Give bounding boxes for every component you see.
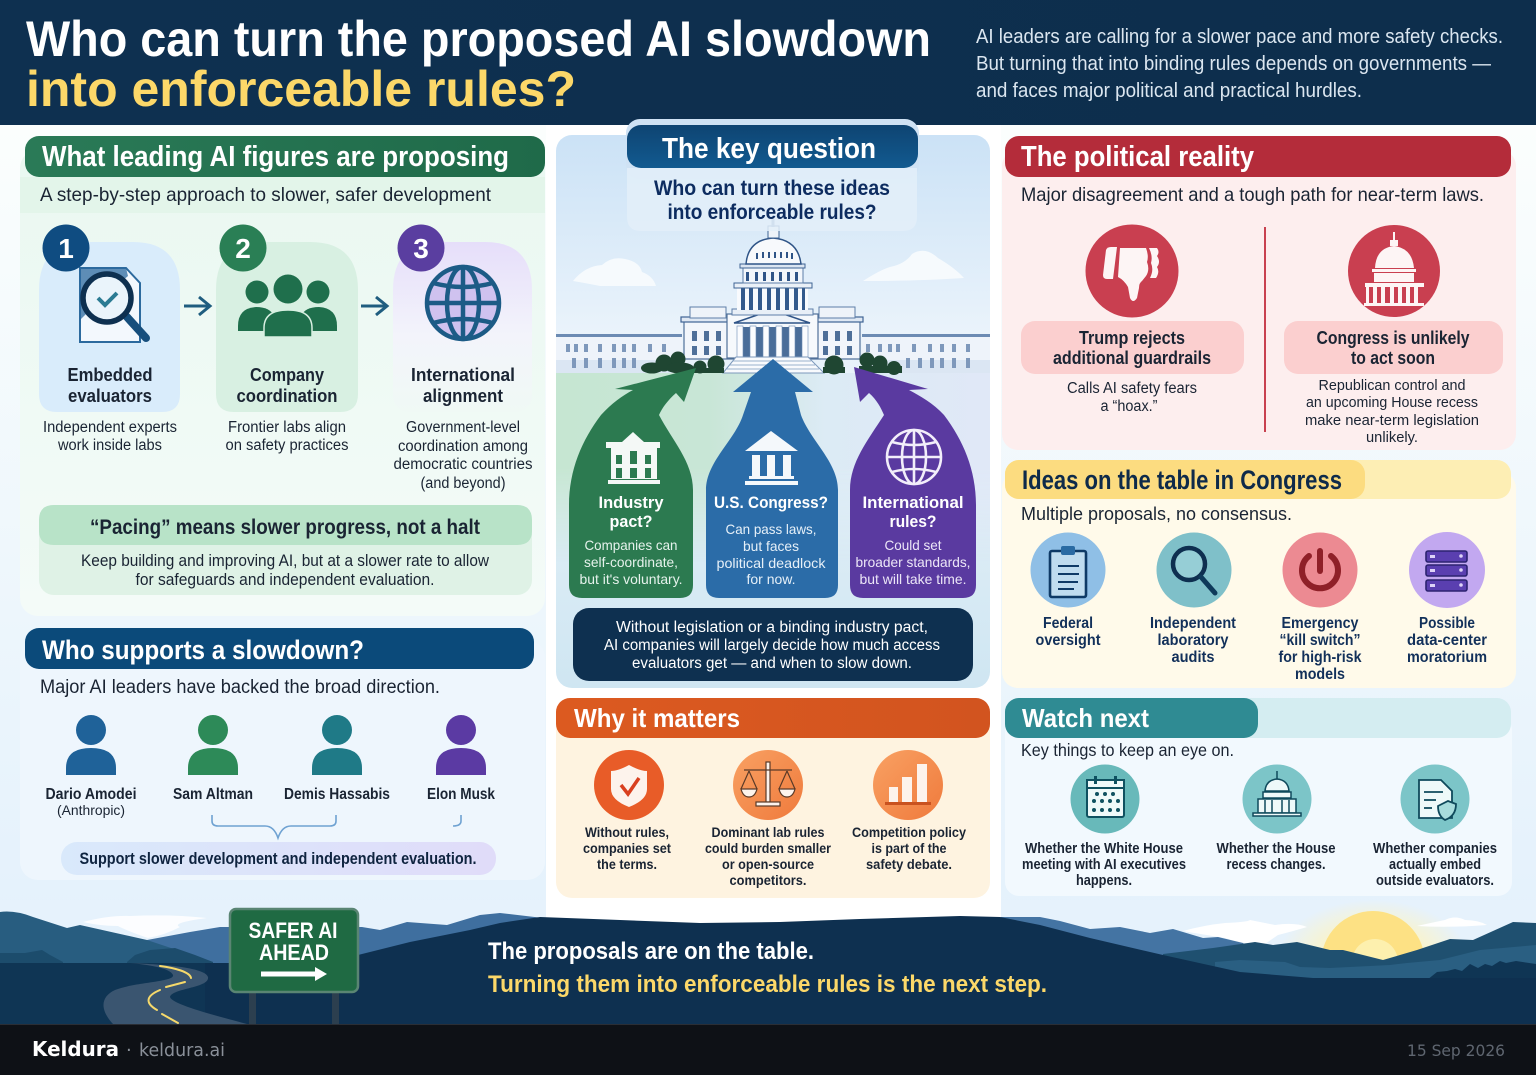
step badge 2: 2	[235, 233, 251, 264]
item: emergency kill switch: models	[1295, 666, 1345, 683]
arrow: U.S. Congress: for now.	[746, 571, 796, 587]
subheading: Multiple proposals, no consensus.	[1021, 503, 1292, 524]
key question text: into enforceable rules?	[668, 201, 876, 224]
item: without rules	[583, 750, 671, 872]
arrow: step 1 to 2	[184, 297, 210, 315]
panel: why it matters	[556, 698, 990, 898]
panel: who supports a slowdown	[20, 628, 545, 880]
step 2 company coordination: on safety practices	[226, 437, 349, 454]
icon: globe	[887, 430, 941, 484]
item: congress unlikely: unlikely.	[1366, 429, 1418, 446]
item: competition policy: safety debate.	[866, 856, 952, 872]
intro text	[976, 26, 1503, 102]
support pill: Support slower development and independent evaluation.	[80, 850, 476, 868]
road sign	[230, 909, 358, 1024]
item: congress unlikely: Congress is unlikely	[1316, 328, 1470, 348]
item: house recess: recess changes.	[1226, 857, 1326, 873]
item: trump rejects: Calls AI safety fears	[1067, 380, 1197, 397]
item: emergency kill switch	[1278, 532, 1362, 683]
item: federal oversight	[1030, 532, 1106, 649]
item: embed outside evaluators: Whether companies	[1373, 841, 1497, 857]
arrow: industry pact: Companies can	[584, 537, 678, 553]
road	[103, 963, 247, 1024]
item: congress unlikely: make near-term legislation	[1305, 412, 1479, 429]
bracket	[212, 815, 461, 838]
heading	[1005, 136, 1511, 177]
item: dominant lab rules: or open-source	[722, 856, 814, 872]
item: white house meeting: happens.	[1076, 873, 1132, 889]
person: Elon Musk	[427, 715, 495, 803]
panel: what leading AI figures are proposing	[20, 136, 545, 616]
person: Sam Altman	[173, 715, 253, 803]
step 3 international alignment: democratic countries	[394, 456, 533, 473]
item: independent laboratory audits	[1150, 532, 1236, 666]
step badge 2	[220, 224, 266, 272]
step 1 embedded evaluators: Independent experts	[43, 419, 177, 436]
arrow: international rules: International	[862, 493, 964, 512]
subheading: Key things to keep an eye on.	[1021, 740, 1234, 760]
step 2 company coordination: coordination	[236, 386, 338, 406]
item: congress unlikely: to act soon	[1351, 348, 1435, 368]
icon: institution	[606, 432, 660, 484]
item: trump rejects: additional guardrails	[1053, 348, 1211, 368]
arrow: international rules: broader standards,	[856, 554, 970, 570]
closing message: The proposals are on the table.	[488, 938, 814, 965]
panel: the key question	[556, 119, 990, 688]
heading: The political reality	[1021, 141, 1254, 173]
callout: without legislation	[573, 608, 973, 681]
footer: ·	[126, 1040, 132, 1061]
step 1 embedded evaluators: work inside labs	[57, 437, 162, 454]
item: data-center moratorium: data-center	[1407, 632, 1487, 649]
subheading: Major AI leaders have backed the broad direction.	[40, 677, 440, 698]
center block	[727, 314, 818, 358]
item: data-center moratorium: Possible	[1419, 615, 1475, 632]
item: white house meeting: Whether the White House	[1025, 841, 1183, 857]
callout: without legislation: evaluators get — and when to slow down.	[632, 655, 912, 672]
icon: capitol	[1364, 232, 1424, 306]
item: independent laboratory audits: audits	[1172, 649, 1214, 666]
item: federal oversight: Federal	[1043, 615, 1093, 632]
heading	[1005, 460, 1511, 499]
divider	[1264, 227, 1266, 432]
callout: pacing: Keep building and improving AI, but at a slower rate to allow	[81, 552, 489, 570]
footer: keldura.ai	[139, 1041, 225, 1061]
step 2 company coordination	[216, 224, 358, 454]
illustration: capitol building	[556, 218, 990, 375]
heading tab: The key question	[662, 133, 876, 165]
arrow: industry pact: self-coordinate,	[584, 554, 678, 570]
step badge 1	[42, 224, 90, 272]
arrow: international rules: rules?	[890, 512, 936, 531]
icon: columned building	[745, 431, 798, 485]
item: competition policy	[852, 750, 966, 872]
header band	[0, 0, 1536, 125]
footer: 15 Sep 2026	[1407, 1041, 1505, 1060]
heading tab	[626, 119, 919, 179]
clouds	[83, 915, 1487, 944]
callout: without legislation: AI companies will largely decide how much access	[604, 637, 940, 654]
callout: pacing: for safeguards and independent evaluation.	[136, 571, 434, 589]
landscape banner	[0, 900, 1536, 1024]
heading: Watch next	[1022, 703, 1149, 733]
item: white house meeting	[1022, 764, 1186, 889]
panel: watch next	[1005, 698, 1512, 896]
item: white house meeting: meeting with AI executives	[1022, 857, 1186, 873]
item: congress unlikely	[1284, 225, 1503, 446]
person: Dario Amodei	[46, 715, 136, 818]
callout: pacing: “Pacing” means slower progress, not a halt	[90, 515, 480, 539]
icon: globe	[427, 267, 499, 339]
item: embed outside evaluators: outside evaluators.	[1376, 873, 1494, 889]
item: dominant lab rules	[705, 750, 831, 888]
step 1 embedded evaluators: Embedded	[68, 365, 152, 385]
step 3 international alignment: Government-level	[406, 419, 520, 436]
wings	[684, 321, 860, 359]
heading: Why it matters	[574, 703, 740, 733]
item: without rules: the terms.	[597, 856, 657, 872]
item: trump rejects: Trump rejects	[1079, 328, 1185, 348]
item: independent laboratory audits: laboratory	[1158, 632, 1229, 649]
arrow: step 2 to 3	[361, 297, 387, 315]
step 3 international alignment	[393, 224, 533, 492]
subheading: Major disagreement and a tough path for near-term laws.	[1021, 184, 1484, 206]
panel: the political reality	[1002, 136, 1516, 450]
person: Demis Hassabis	[284, 715, 390, 803]
road sign: AHEAD	[259, 940, 329, 965]
arrow: U.S. Congress: but faces	[743, 538, 799, 554]
footer	[0, 1024, 1536, 1075]
lawn	[556, 373, 990, 541]
item: without rules: companies set	[583, 840, 671, 856]
heading	[556, 698, 990, 738]
clouds	[573, 251, 964, 286]
dark hill	[205, 916, 1536, 1024]
arrow: industry pact: Industry	[598, 493, 664, 512]
mountains	[0, 912, 1536, 1024]
item: competition policy: Competition policy	[852, 824, 966, 840]
item: dominant lab rules: could burden smaller	[705, 840, 831, 856]
arrow: industry pact: but it's voluntary.	[580, 571, 682, 587]
step 3 international alignment: (and beyond)	[420, 475, 506, 492]
icon: thumbs down	[1103, 247, 1159, 301]
panel: ideas on the table in congress	[1002, 460, 1516, 688]
sun	[1278, 900, 1468, 1016]
item: embed outside evaluators: actually embed	[1389, 857, 1481, 873]
person: Dario Amodei: (Anthropic)	[57, 802, 125, 818]
icon: three people	[238, 274, 337, 337]
item: embed outside evaluators	[1373, 764, 1497, 889]
step 2 company coordination: Company	[250, 365, 324, 385]
person: Sam Altman: Sam Altman	[173, 786, 253, 803]
closing message: Turning them into enforceable rules is the next step.	[488, 971, 1047, 998]
key question text	[627, 168, 917, 231]
support pill	[61, 842, 496, 875]
steps	[723, 357, 824, 373]
item: competition policy: is part of the	[872, 840, 947, 856]
arrow: international rules	[850, 367, 976, 598]
key question text: Who can turn these ideas	[654, 177, 890, 200]
intro text: and faces major political and practical hurdles.	[976, 80, 1362, 102]
item: dominant lab rules: competitors.	[730, 872, 806, 888]
step badge 1: 1	[58, 233, 74, 264]
item: house recess: Whether the House	[1216, 841, 1336, 857]
title: into enforceable rules?	[26, 61, 576, 117]
arrow: U.S. Congress: Can pass laws,	[726, 521, 816, 537]
callout: pacing	[39, 505, 532, 595]
item: data-center moratorium	[1407, 532, 1487, 666]
bushes	[641, 352, 902, 375]
item: federal oversight: oversight	[1036, 632, 1100, 649]
intro text: AI leaders are calling for a slower pace and more safety checks.	[976, 26, 1503, 48]
step 3 international alignment: coordination among	[398, 438, 528, 455]
arrow: U.S. Congress: U.S. Congress?	[714, 493, 828, 512]
person: Demis Hassabis: Demis Hassabis	[284, 786, 390, 803]
item: congress unlikely: an upcoming House recess	[1306, 394, 1478, 411]
item: without rules: Without rules,	[585, 824, 669, 840]
item: congress unlikely: Republican control and	[1318, 377, 1466, 394]
person: Elon Musk: Elon Musk	[427, 786, 495, 803]
arrow: U.S. Congress: political deadlock	[716, 555, 827, 571]
step 3 international alignment: International	[411, 365, 515, 385]
item: dominant lab rules: Dominant lab rules	[712, 824, 825, 840]
title: Who can turn the proposed AI slowdown	[26, 11, 931, 67]
arrow: international rules: Could set	[884, 537, 942, 553]
step badge 3: 3	[413, 233, 429, 264]
intro text: But turning that into binding rules depends on governments —	[976, 53, 1491, 75]
item: data-center moratorium: moratorium	[1407, 649, 1487, 666]
footer: Keldura	[32, 1037, 119, 1061]
closing message	[488, 938, 1047, 998]
arrow: industry pact	[569, 368, 696, 598]
item: emergency kill switch: for high-risk	[1278, 649, 1362, 666]
upper drum	[732, 309, 813, 315]
heading	[25, 628, 534, 669]
step 1 embedded evaluators: evaluators	[68, 386, 152, 406]
item: trump rejects: a “hoax.”	[1100, 398, 1158, 415]
callout: without legislation: Without legislation or a binding industry pact,	[616, 619, 928, 636]
item: emergency kill switch: Emergency	[1282, 615, 1359, 632]
item: house recess	[1216, 764, 1336, 873]
road sign: SAFER AI	[248, 918, 338, 943]
item: independent laboratory audits: Independent	[1150, 615, 1236, 632]
step 3 international alignment: alignment	[423, 386, 503, 406]
title	[26, 11, 931, 117]
heading	[1005, 698, 1511, 738]
heading: What leading AI figures are proposing	[42, 141, 509, 173]
heading: Ideas on the table in Congress	[1022, 465, 1342, 495]
arrow: international rules: but will take time.	[860, 571, 966, 587]
item: emergency kill switch: “kill switch”	[1280, 632, 1360, 649]
arrow: U.S. Congress	[706, 359, 838, 598]
heading: Who supports a slowdown?	[42, 635, 364, 665]
icon: document and magnifier	[80, 268, 146, 342]
person: Dario Amodei: Dario Amodei	[46, 786, 136, 803]
step badge 3	[398, 224, 444, 272]
subheading: A step-by-step approach to slower, safer development	[40, 184, 492, 206]
arrow: industry pact: pact?	[610, 512, 652, 531]
step 1 embedded evaluators	[39, 224, 180, 454]
step 2 company coordination: Frontier labs align	[228, 419, 346, 436]
item: trump rejects	[1021, 224, 1244, 415]
